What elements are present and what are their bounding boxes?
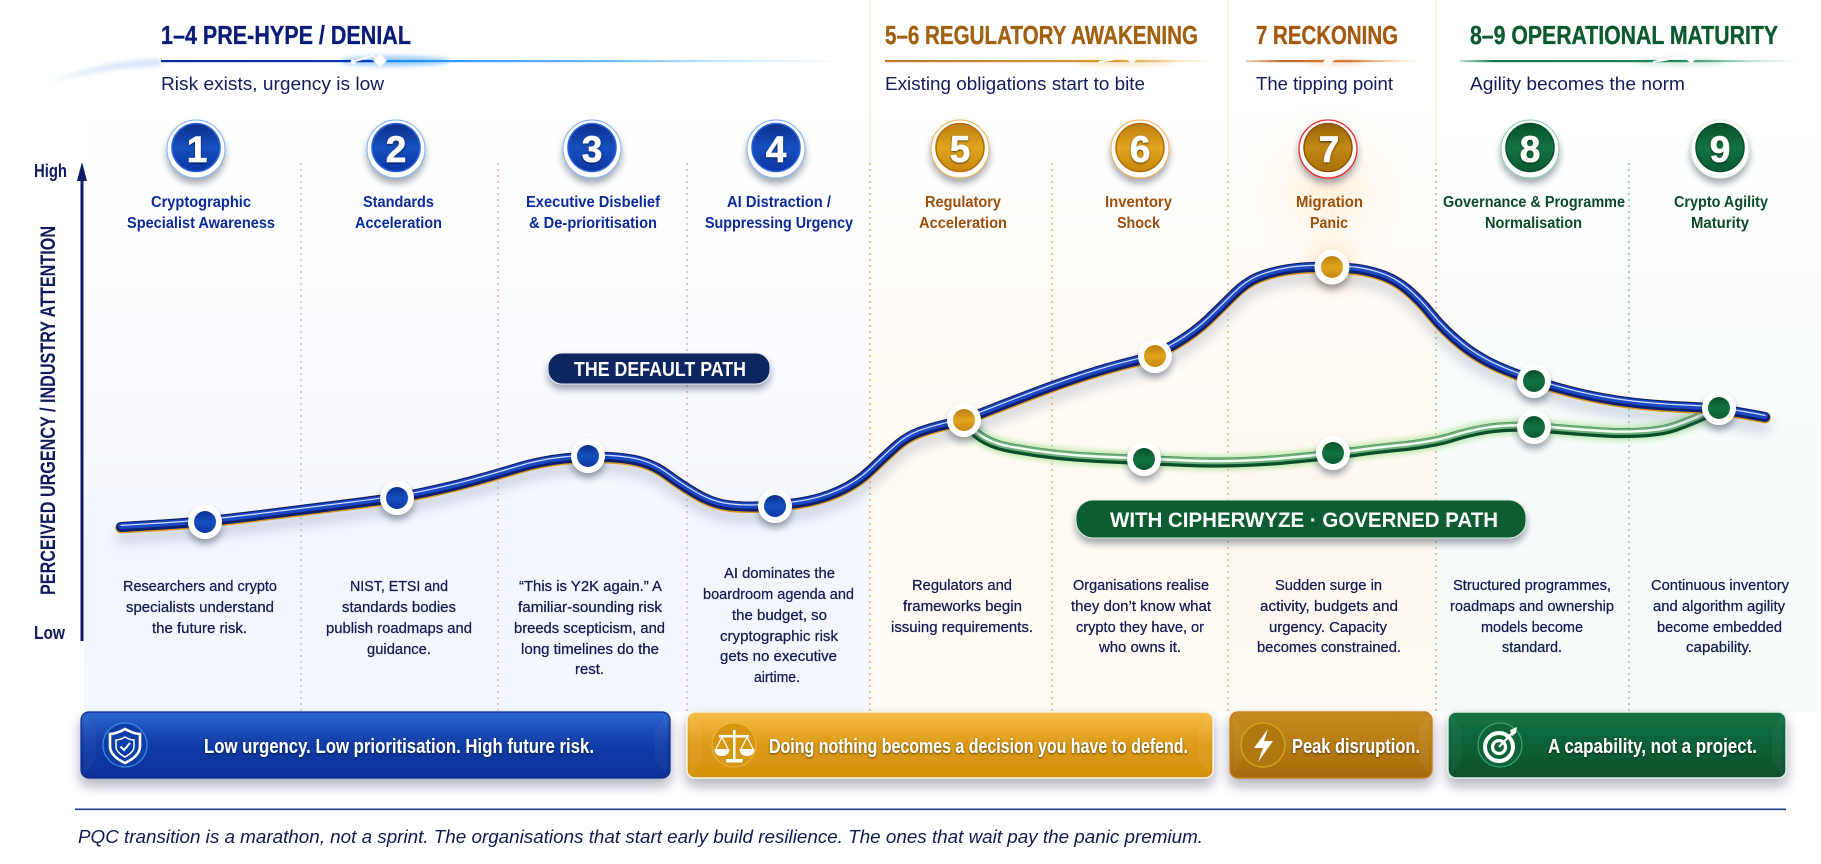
- title: Suppressing Urgency: [705, 215, 853, 232]
- description: the future risk.: [152, 620, 247, 637]
- subheading: The tipping point: [1256, 74, 1393, 94]
- badge 7: [1299, 120, 1357, 178]
- icon: shield: [103, 723, 147, 767]
- description: guidance.: [367, 641, 431, 658]
- description: [1071, 577, 1212, 656]
- title: [526, 194, 661, 232]
- badge 7: 7: [1319, 129, 1339, 170]
- title: Specialist Awareness: [127, 215, 275, 232]
- description: “This is Y2K again.” A: [519, 578, 662, 595]
- title: [127, 194, 275, 232]
- panel: phase header 7: [1246, 20, 1420, 94]
- description: Regulators and: [912, 577, 1012, 594]
- subheading: Existing obligations start to bite: [885, 74, 1145, 94]
- bar: capability: [1448, 712, 1786, 778]
- caption: Doing nothing becomes a decision you have to defend.: [769, 735, 1188, 758]
- description: become embedded: [1657, 619, 1782, 636]
- title: Inventory: [1105, 194, 1172, 211]
- chart nodes: [188, 250, 1736, 539]
- title: [1105, 194, 1172, 232]
- axis: [34, 161, 87, 643]
- badge 5: 5: [950, 129, 970, 170]
- description: the budget, so: [732, 607, 827, 624]
- bar: low urgency: [81, 712, 670, 778]
- pill: the default path: [548, 353, 770, 384]
- bar: doing nothing: [687, 712, 1213, 778]
- description: who owns it.: [1098, 639, 1181, 656]
- title: Migration: [1296, 194, 1363, 211]
- title: Maturity: [1691, 215, 1749, 232]
- icon: scales: [712, 723, 756, 767]
- description: familiar-sounding risk: [518, 599, 663, 616]
- badge 2: [367, 120, 425, 178]
- badge 8: [1501, 120, 1559, 178]
- title: Cryptographic: [151, 194, 251, 211]
- description: standards bodies: [342, 599, 456, 616]
- amber rule: [885, 54, 1215, 66]
- caption: Peak disruption.: [1292, 735, 1420, 758]
- description: AI dominates the: [724, 565, 835, 582]
- chart: default path curve: [121, 265, 1765, 537]
- panel: step 2: [326, 120, 472, 658]
- glow: migration panic: [1244, 100, 1414, 305]
- panel: step 4: [703, 120, 854, 686]
- description: activity, budgets and: [1260, 598, 1398, 615]
- title: Crypto Agility: [1674, 194, 1768, 211]
- title: Governance & Programme: [1443, 194, 1625, 211]
- subheading: Risk exists, urgency is low: [161, 74, 385, 94]
- title: Standards: [363, 194, 434, 211]
- title: AI Distraction /: [727, 194, 832, 211]
- caption: A capability, not a project.: [1548, 735, 1757, 758]
- axis title: PERCEIVED URGENCY / INDUSTRY ATTENTION: [37, 226, 60, 595]
- description: [326, 578, 472, 658]
- title: Panic: [1310, 215, 1348, 232]
- heading: pre-hype: 1–4 PRE-HYPE / DENIAL: [161, 20, 411, 50]
- panel: step 9: [1651, 120, 1789, 656]
- description: cryptographic risk: [720, 628, 838, 645]
- description: NIST, ETSI and: [350, 578, 448, 595]
- heading: regulatory awakening: 5–6 REGULATORY AWAKENING: [885, 20, 1198, 50]
- description: Continuous inventory: [1651, 577, 1789, 594]
- description: long timelines do the: [521, 641, 659, 658]
- title: Acceleration: [355, 215, 442, 232]
- badge 3: [563, 120, 621, 178]
- title: Regulatory: [925, 194, 1001, 211]
- title: [705, 194, 853, 232]
- panel: step 1: [123, 120, 277, 637]
- title: Executive Disbelief: [526, 194, 661, 211]
- description: [1450, 577, 1614, 656]
- description: issuing requirements.: [891, 619, 1033, 636]
- pill: governed path: [1076, 500, 1526, 538]
- badge 3: 3: [582, 129, 602, 170]
- panel: step 3: [514, 120, 665, 678]
- title: & De-prioritisation: [529, 215, 657, 232]
- icon: target: [1478, 723, 1522, 767]
- description: Researchers and crypto: [123, 578, 277, 595]
- badge 1: 1: [187, 129, 207, 170]
- badge 1: [167, 120, 225, 178]
- green rule: [1460, 54, 1800, 66]
- badge 6: [1111, 120, 1169, 178]
- description: standard.: [1502, 639, 1562, 656]
- title: Acceleration: [919, 215, 1007, 232]
- description: [123, 578, 277, 637]
- description: airtime.: [754, 669, 800, 686]
- pill: the default path: THE DEFAULT PATH: [574, 359, 746, 381]
- description: boardroom agenda and: [703, 586, 854, 603]
- badge 4: [747, 120, 805, 178]
- description: Organisations realise: [1073, 577, 1209, 594]
- badge 4: 4: [766, 129, 787, 170]
- description: becomes constrained.: [1257, 639, 1401, 656]
- title: [1443, 194, 1625, 232]
- description: gets no executive: [720, 648, 837, 665]
- description: frameworks begin: [903, 598, 1022, 615]
- pill: governed path: WITH CIPHERWYZE · GOVERNED PATH: [1110, 509, 1498, 532]
- description: Structured programmes,: [1453, 577, 1611, 594]
- description: capability.: [1686, 639, 1752, 656]
- title: Shock: [1117, 215, 1160, 232]
- description: models become: [1481, 619, 1583, 636]
- heading: reckoning: 7 RECKONING: [1256, 20, 1398, 50]
- description: [891, 577, 1033, 636]
- bar: peak disruption: [1230, 712, 1432, 778]
- icon: lightning: [1241, 723, 1285, 767]
- description: and algorithm agility: [1653, 598, 1785, 615]
- badge 8: 8: [1520, 129, 1540, 170]
- description: [703, 565, 854, 686]
- axis label high: High: [34, 161, 67, 181]
- description: they don’t know what: [1071, 598, 1212, 615]
- badge 5: [931, 120, 989, 178]
- badge 9: 9: [1710, 129, 1730, 170]
- panel: step 8: [1443, 120, 1625, 656]
- title: [1296, 194, 1363, 232]
- description: specialists understand: [126, 599, 274, 616]
- panel: step 7: [1257, 120, 1401, 656]
- background zones: [84, 0, 1821, 712]
- badge 2: 2: [386, 129, 406, 170]
- description: crypto they have, or: [1076, 619, 1204, 636]
- subheading: Agility becomes the norm: [1470, 74, 1685, 94]
- description: Sudden surge in: [1275, 577, 1382, 594]
- axis arrow: [77, 162, 87, 641]
- title: [355, 194, 442, 232]
- panel: phase header 1-4: [50, 20, 850, 94]
- axis label low: Low: [34, 623, 66, 643]
- panel: phase header 8-9: [1460, 20, 1800, 94]
- description: [514, 578, 665, 678]
- description: publish roadmaps and: [326, 620, 472, 637]
- panel: step 6: [1071, 120, 1212, 656]
- panel: step 5: [891, 120, 1033, 636]
- description: rest.: [575, 661, 604, 678]
- divider rule: [75, 808, 1786, 810]
- description: urgency. Capacity: [1269, 619, 1387, 636]
- badge 9: [1691, 120, 1749, 178]
- title: [919, 194, 1007, 232]
- orange rule: [1246, 57, 1420, 66]
- glowing rule: [50, 54, 850, 82]
- description: [1651, 577, 1789, 656]
- description: breeds scepticism, and: [514, 620, 665, 637]
- chart: governed path curve: [964, 406, 1719, 463]
- badge 6: 6: [1130, 129, 1150, 170]
- caption: Low urgency. Low prioritisation. High future risk.: [204, 735, 594, 758]
- description: [1257, 577, 1401, 656]
- footer statement: PQC transition is a marathon, not a sprint. The organisations that start early build resilience. The ones that wait pay the panic premium.: [78, 827, 1203, 847]
- panel: phase header 5-6: [885, 20, 1215, 94]
- title: [1674, 194, 1768, 232]
- title: Normalisation: [1485, 215, 1582, 232]
- description: roadmaps and ownership: [1450, 598, 1614, 615]
